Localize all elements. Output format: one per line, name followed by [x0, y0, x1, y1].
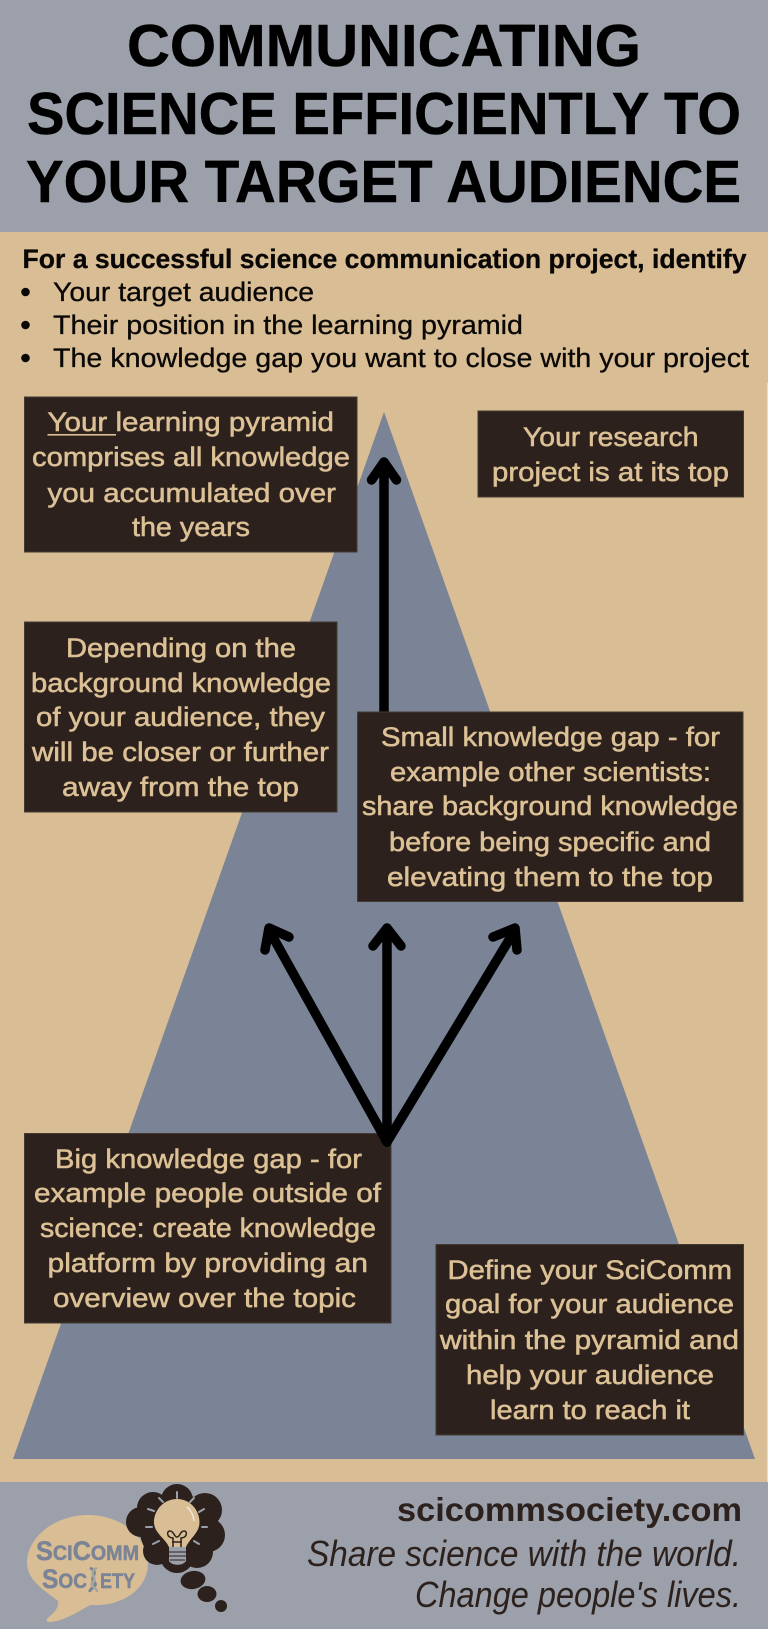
learning pyramid — [13, 412, 755, 1459]
tagline: Share science with the world. — [307, 1533, 741, 1574]
callout: depending on background knowledge: will be closer or further — [31, 737, 329, 767]
callout: big knowledge gap: platform by providing an — [48, 1248, 368, 1278]
tagline — [307, 1533, 741, 1615]
arrow: up to the top of the pyramid — [372, 462, 396, 716]
callout: define your scicomm goal: learn to reach it — [490, 1395, 691, 1425]
intro text block: The knowledge gap you want to close with your project — [53, 343, 750, 373]
callout: depending on background knowledge — [24, 622, 337, 812]
callout: depending on background knowledge: background knowledge — [31, 668, 331, 698]
callout: big knowledge gap: Big knowledge gap - for — [55, 1144, 362, 1174]
callout: small knowledge gap: example other scientists: — [390, 757, 711, 787]
callout: small knowledge gap: before being specific and — [389, 827, 711, 857]
intro text block: For a successful science communication project, identify — [22, 244, 747, 274]
callout: define your scicomm goal: within the pyramid and — [439, 1325, 739, 1355]
callout: depending on background knowledge: of your audience, they — [36, 702, 326, 732]
intro text block: Their position in the learning pyramid — [53, 310, 523, 340]
logo: thought cloud with light bulb — [126, 1484, 227, 1612]
callout: big knowledge gap: overview over the topic — [53, 1283, 356, 1313]
callout: define your scicomm goal: Define your SciComm — [448, 1255, 732, 1285]
callout: depending on background knowledge: away from the top — [62, 772, 299, 802]
callout: define your scicomm goal — [436, 1244, 744, 1435]
callout: small knowledge gap: Small knowledge gap - for — [381, 722, 720, 752]
logo: speech bubble with wordmark: SCICOMM — [36, 1536, 139, 1566]
intro text block — [21, 244, 750, 373]
title: YOUR TARGET AUDIENCE — [26, 149, 741, 215]
panel: footer band — [0, 1482, 768, 1629]
callout: research project at top: Your research — [523, 422, 698, 452]
tagline: Change people's lives. — [415, 1574, 741, 1615]
logo: speech bubble with wordmark — [27, 1515, 148, 1622]
callout: big knowledge gap: science: create knowledge — [40, 1213, 376, 1243]
callout: your learning pyramid: the years — [132, 512, 250, 542]
callout: your learning pyramid — [24, 397, 357, 552]
callout: define your scicomm goal: goal for your audience — [445, 1289, 734, 1319]
intro text block: Your target audience — [53, 277, 314, 307]
website address: scicommsociety.com — [397, 1491, 742, 1528]
callout: your learning pyramid: Your learning pyramid — [48, 407, 334, 437]
arrows: three paths up from the big knowledge gap — [265, 928, 517, 1142]
logo: speech bubble with wordmark: ETY — [100, 1570, 135, 1593]
logo: speech bubble with wordmark: SOC — [42, 1564, 87, 1594]
callout: your learning pyramid: comprises all knowledge — [32, 442, 350, 472]
callout: big knowledge gap: example people outside of — [34, 1178, 382, 1208]
callout: small knowledge gap: share background knowledge — [362, 791, 738, 821]
callout: define your scicomm goal: help your audience — [466, 1360, 714, 1390]
callout: research project at top — [478, 411, 744, 497]
title: COMMUNICATING — [127, 13, 641, 79]
callout: big knowledge gap — [24, 1134, 391, 1323]
title — [26, 13, 741, 215]
callout: research project at top: project is at its top — [492, 457, 729, 487]
panel: title band — [0, 0, 768, 232]
callout: your learning pyramid: you accumulated over — [48, 478, 336, 508]
callout: depending on background knowledge: Depending on the — [66, 633, 296, 663]
callout: small knowledge gap — [358, 712, 743, 902]
callout: small knowledge gap: elevating them to the top — [387, 862, 713, 892]
title: SCIENCE EFFICIENTLY TO — [27, 81, 741, 147]
